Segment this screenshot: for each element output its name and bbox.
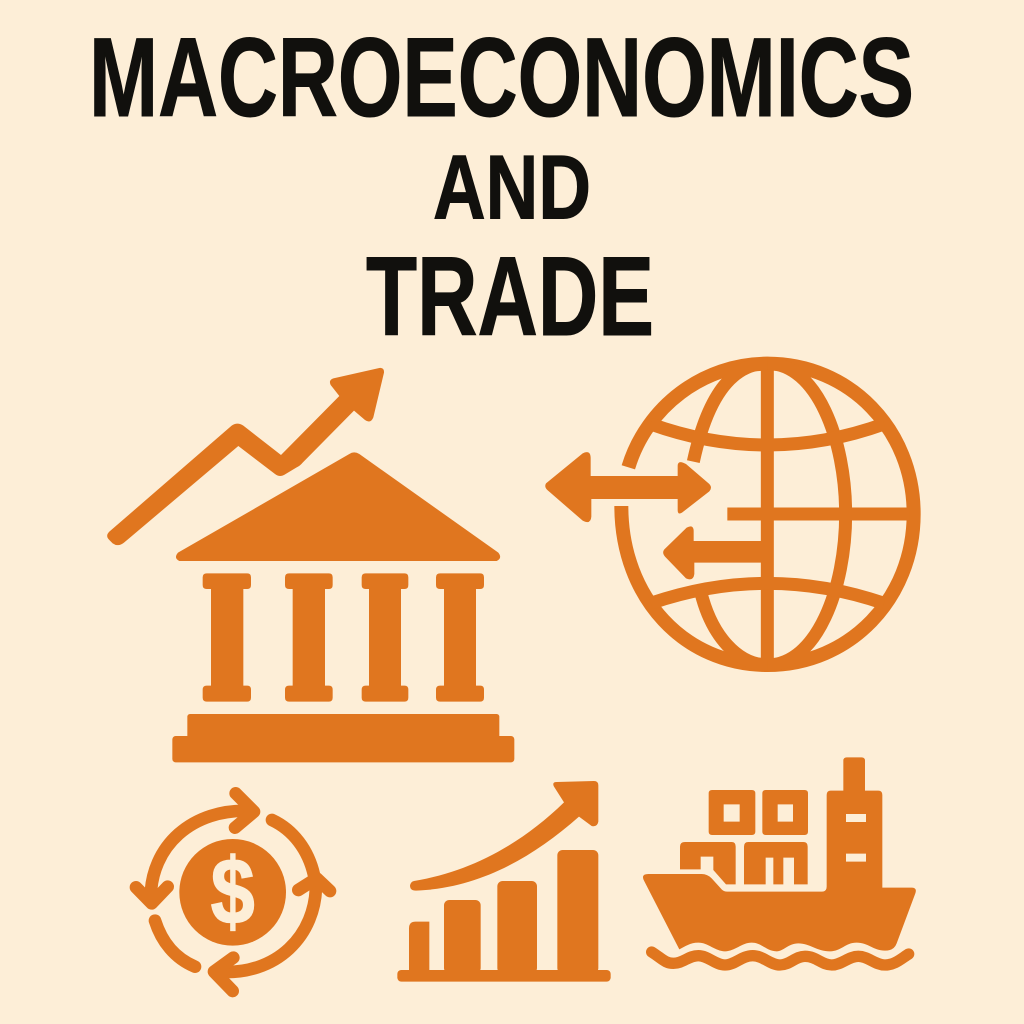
waves: [652, 952, 909, 965]
inward trade arrow: [663, 526, 772, 579]
icon: growth bar chart: [397, 781, 611, 982]
title: TRADE: [366, 234, 654, 359]
rising trend arrow: [107, 368, 384, 545]
title: [89, 15, 914, 359]
dollar sign: $: [211, 840, 255, 944]
bank roof: [176, 452, 500, 561]
chart bars: [397, 850, 611, 982]
globe latitudes: [651, 424, 910, 603]
icon: money circulation: [136, 793, 330, 991]
globe meridians: [693, 363, 846, 665]
growth arrow: [410, 781, 598, 891]
title: AND: [433, 138, 591, 238]
circular arrows: [136, 793, 330, 991]
bank columns: [203, 573, 484, 702]
icon: globe with trade arrows: [545, 363, 914, 665]
globe outline: [621, 364, 914, 665]
icon: container ship: [643, 757, 916, 965]
icon: central bank with rising line: [107, 368, 514, 762]
ship hull and bridge: [643, 757, 916, 951]
coin: [179, 839, 286, 946]
double-headed trade arrow: [545, 452, 711, 522]
containers: [680, 790, 808, 884]
bank base: [172, 714, 514, 762]
